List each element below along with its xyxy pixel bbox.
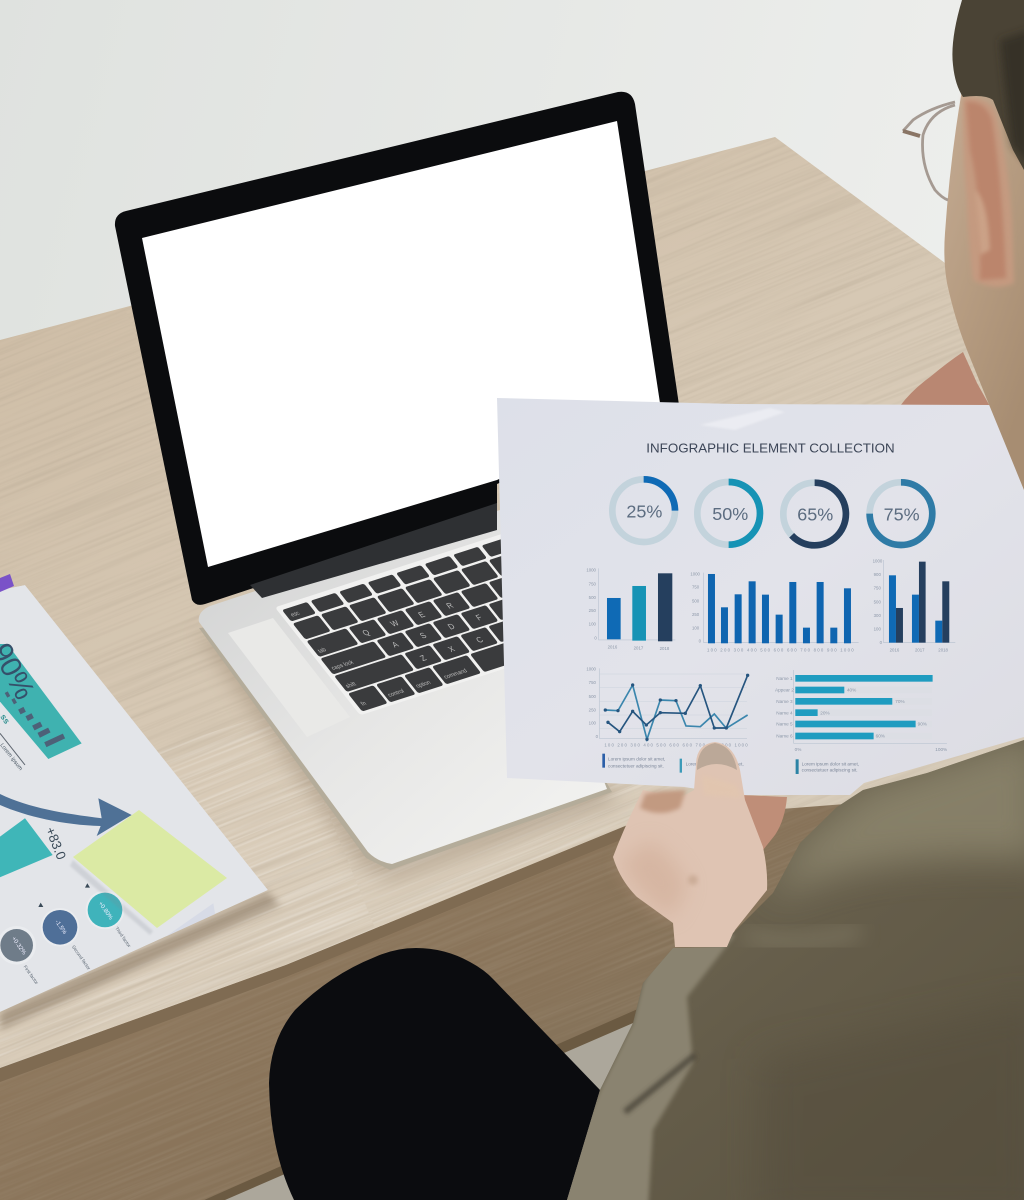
keyboard: Z — [418, 654, 428, 663]
donut 65% — [783, 483, 846, 545]
teal block — [0, 818, 53, 877]
keyboard: shift — [345, 682, 358, 690]
legend items: consectetuer adipiscing sit. — [802, 767, 858, 772]
keyboard: A — [390, 640, 401, 649]
bar chart 2: 250 — [692, 612, 700, 617]
bar chart 1: 2017 — [634, 645, 644, 650]
keyboard: control — [387, 689, 406, 699]
keyboard: S — [418, 631, 429, 640]
bar chart 1: 2018 — [660, 646, 670, 651]
infographic on held paper, bottom half — [586, 667, 947, 774]
metric circle teal: +0.80% — [97, 901, 114, 922]
bar chart 3: 2017 — [915, 648, 925, 653]
bar chart 1: 500 — [589, 595, 596, 600]
bar chart 1: 250 — [589, 608, 596, 613]
bar chart 3: 2016 — [890, 648, 900, 653]
bar chart 3: 900 — [874, 572, 881, 577]
keyboard: caps lock — [330, 660, 355, 672]
value label: +83.0 — [43, 825, 69, 862]
legend items: Lorem ipsum dolor sit amet, — [608, 757, 665, 762]
keyboard: F — [474, 613, 484, 622]
bar chart 3: 2018 — [938, 648, 949, 653]
line chart: 100 200 300 400 500 600 600 700 800 900 1000 — [604, 743, 748, 748]
dark sleeve fold — [625, 1055, 695, 1112]
bar chart 1: 0 — [594, 635, 597, 640]
bar chart 2 — [690, 571, 859, 653]
dark hair shading — [1000, 30, 1024, 165]
ear — [963, 97, 1014, 287]
donut 25% — [612, 479, 675, 542]
line chart: 500 — [589, 694, 596, 699]
bar chart 2: 1000 — [690, 571, 701, 576]
ear highlight — [975, 190, 990, 255]
horizontal bar chart: 60% — [876, 734, 885, 739]
keyboard: D — [446, 622, 457, 631]
donut 75%: 75% — [884, 504, 920, 524]
keyboard — [275, 514, 650, 715]
legend items: Lorem ipsum dolor sit amet, — [802, 762, 859, 767]
keyboard: tab — [317, 647, 328, 655]
donut 25%: 25% — [626, 501, 662, 521]
sticky note — [73, 810, 227, 928]
line chart: 100 — [589, 721, 596, 726]
shoulder highlight — [780, 740, 1024, 894]
metric captions: Third factor — [114, 926, 132, 949]
keyboard: X — [446, 644, 457, 654]
bar chart 1: 1000 — [586, 568, 597, 573]
legend items: sit. — [732, 768, 738, 773]
holding hand with thumb — [613, 742, 787, 947]
horizontal bar chart: Appear 2 — [775, 688, 794, 693]
keyboard: Q — [360, 628, 372, 638]
black trousers knee — [269, 948, 600, 1200]
metric captions — [23, 926, 132, 986]
keyboard: W — [388, 619, 401, 629]
horizontal bar chart: Name 1 — [776, 676, 793, 681]
ear inner shading — [966, 102, 1006, 280]
horizontal bar chart: Name 6 — [776, 734, 793, 739]
donut 75% — [870, 482, 932, 545]
paper title: INFOGRAPHIC ELEMENT COLLECTION — [646, 441, 895, 456]
keyboard: option — [415, 680, 433, 690]
keyboard: esc — [290, 611, 302, 618]
legend items: consectetuer adipiscing sit. — [608, 763, 664, 768]
bar chart 3: 100 — [874, 627, 881, 632]
held paper — [497, 398, 1024, 795]
horizontal bar chart: 70% — [895, 699, 905, 704]
bar chart 2: 750 — [692, 585, 700, 590]
bar chart 3: 300 — [874, 613, 881, 618]
face — [944, 90, 1024, 490]
horizontal bar chart — [775, 670, 947, 752]
horizontal bar chart: Name 5 — [776, 722, 793, 727]
metric captions: First factor — [23, 964, 39, 986]
bar chart 2: 0 — [699, 639, 702, 644]
metric circle grey: +0.32% — [10, 936, 27, 957]
small marker triangles — [38, 883, 90, 907]
glasses — [903, 102, 955, 200]
line chart: 1000 — [586, 667, 597, 672]
left printed report on desk — [0, 574, 280, 1030]
teal stat card — [0, 638, 82, 759]
bar chart 2: 100 200 300 400 500 600 600 700 800 900 1000 — [707, 648, 854, 653]
legend items: amet, — [732, 762, 744, 767]
metric captions: Second factor — [71, 944, 92, 971]
jacket — [550, 730, 1024, 1200]
infographic on held paper, top half — [586, 441, 955, 653]
hair — [952, 0, 1024, 170]
laptop — [115, 92, 679, 870]
laptop lid — [115, 92, 679, 605]
desk underside and lower shelf — [0, 780, 1024, 1200]
paper crease — [700, 408, 785, 430]
line chart — [586, 667, 749, 748]
bar chart 3: 0 — [880, 640, 883, 645]
purple tab — [0, 574, 14, 592]
line chart: 750 — [589, 680, 596, 685]
bar chart 2: 500 — [692, 598, 700, 603]
bar chart 3 — [873, 558, 955, 653]
horizontal bar chart: 100% — [935, 747, 947, 752]
head — [903, 0, 1024, 490]
donut 65%: 65% — [797, 505, 833, 525]
horizontal bar chart: 90% — [918, 722, 927, 727]
metric circle teal — [88, 892, 122, 928]
bar chart 1: 2016 — [608, 644, 618, 649]
hinge — [250, 503, 497, 598]
line chart: 250 — [589, 707, 596, 712]
legend items: Lorem — [686, 762, 699, 767]
cuff fold highlight — [745, 930, 860, 941]
sticky note shadow — [70, 860, 153, 935]
legend items — [602, 754, 859, 774]
keyboard: R — [444, 601, 456, 610]
bar chart 1: 750 — [589, 581, 596, 586]
metric circle blue: -1.5% — [53, 919, 68, 936]
bar chart 1: 100 — [589, 622, 596, 627]
horizontal bar chart: Name 3 — [776, 699, 793, 704]
donut 50% — [697, 482, 760, 545]
bar chart 3: 750 — [874, 586, 881, 591]
bar chart 3: 1000 — [873, 558, 883, 563]
horizontal bar chart: 40% — [847, 688, 856, 693]
keyboard: fn — [360, 701, 368, 707]
metric circle grey — [0, 929, 33, 962]
sleeve — [550, 935, 735, 1200]
laptop base — [199, 510, 612, 870]
keyboard: E — [416, 610, 428, 619]
keyboard: command — [443, 668, 469, 681]
bar chart 1 — [586, 568, 675, 651]
desk top — [0, 137, 1024, 1082]
lower body shading — [760, 1000, 1024, 1200]
screen — [142, 121, 660, 567]
line chart: 0 — [596, 734, 599, 739]
horizontal bar chart: 0% — [795, 747, 801, 752]
horizontal bar chart: 20% — [820, 710, 830, 715]
bar chart 2: 100 — [692, 625, 700, 630]
bar chart 3: 500 — [874, 599, 881, 604]
keyboard: C — [474, 635, 485, 645]
metric circle blue — [42, 910, 78, 945]
arrow — [0, 794, 132, 836]
horizontal bar chart: Name 4 — [776, 710, 793, 715]
hand behind paper, top right — [900, 352, 992, 410]
laptop shadow on desk — [195, 630, 620, 880]
donut 50%: 50% — [712, 504, 748, 524]
